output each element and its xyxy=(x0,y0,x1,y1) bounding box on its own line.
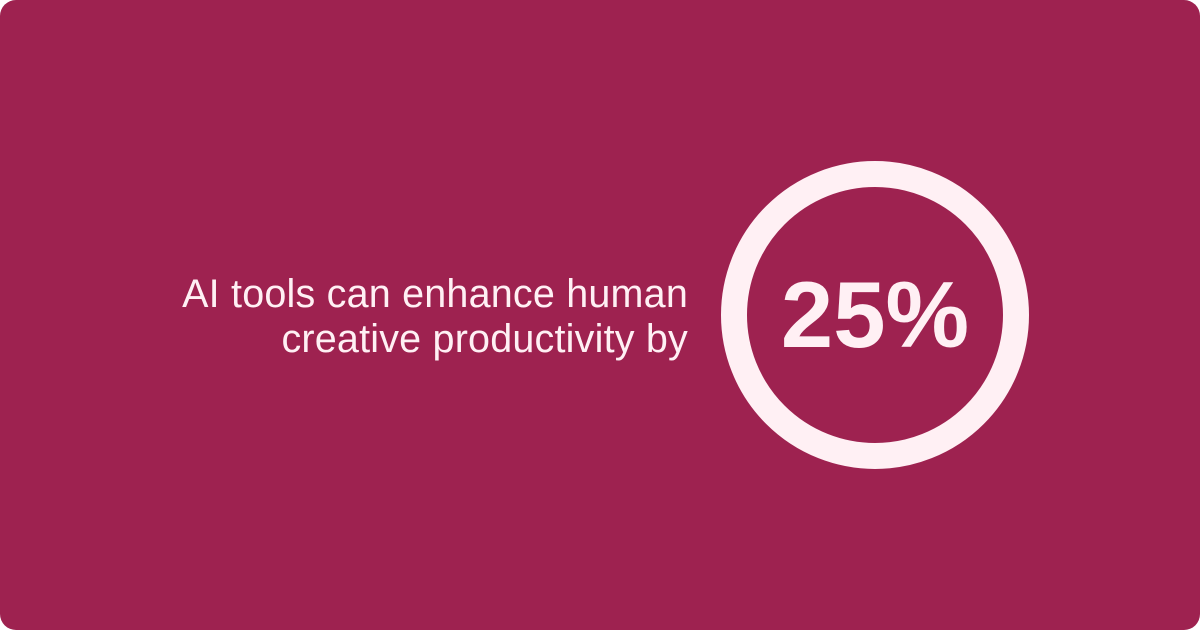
statement text: creative productivity by xyxy=(281,317,688,361)
statement text xyxy=(182,272,688,361)
ring xyxy=(721,161,1029,469)
statement text: AI tools can enhance human xyxy=(182,272,688,316)
statistic value: 25% xyxy=(781,262,969,367)
